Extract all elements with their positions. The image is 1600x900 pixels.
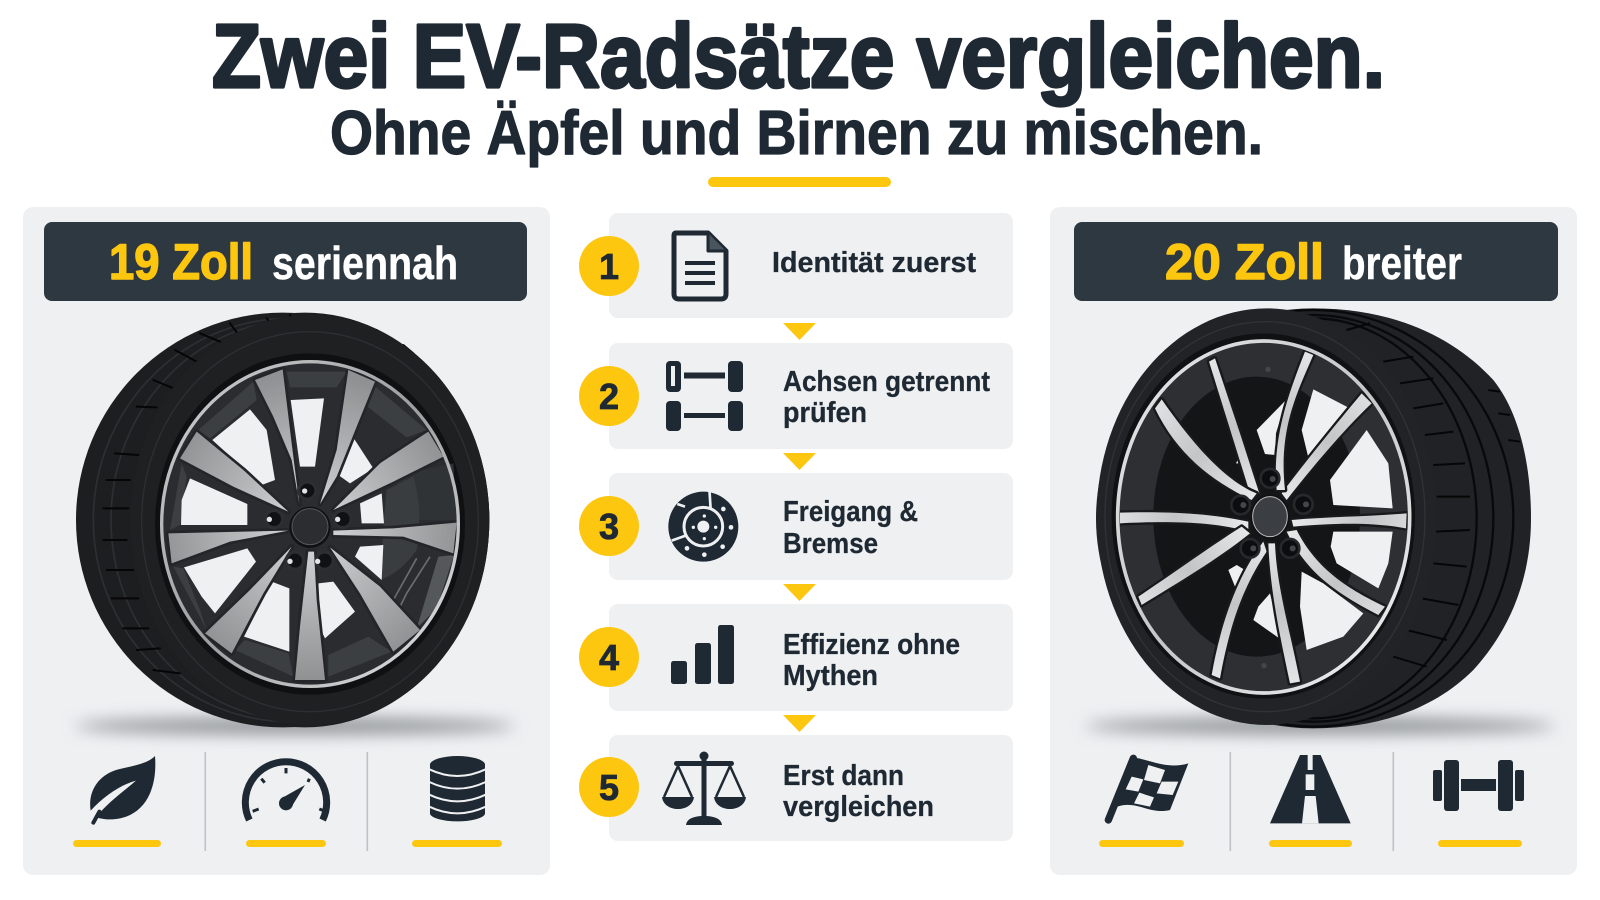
step 5: vergleichen (783, 791, 934, 823)
step 2 (579, 343, 1013, 449)
icon: bars (671, 625, 734, 684)
panel: 19 Zoll (23, 207, 550, 875)
wheel: 19 Zoll (75, 313, 515, 734)
icon: axles (666, 361, 743, 431)
step 3: Freigang & (783, 496, 918, 528)
icon rule 3 (412, 840, 502, 847)
process steps (579, 213, 1013, 841)
icon rule 3 (1438, 840, 1522, 847)
arrow 1 (783, 323, 816, 340)
step 1 (579, 213, 1013, 318)
step 3: Bremse (783, 528, 878, 560)
step 4: 4 (599, 637, 619, 678)
icon: road (1270, 755, 1351, 823)
heading: 20 Zoll breiter (1074, 222, 1558, 301)
step 4: Effizienz ohne (783, 629, 960, 661)
icon: scales (662, 752, 746, 825)
heading: 20 Zoll breiter: breiter (1342, 237, 1462, 289)
step 5: Erst dann (783, 760, 904, 792)
icon rule 1 (1099, 840, 1184, 847)
heading: 20 Zoll breiter: 20 Zoll (1165, 234, 1324, 290)
step 2: prüfen (783, 397, 867, 429)
step 1: Identität zuerst (772, 247, 976, 279)
step 2: Achsen getrennt (783, 366, 990, 398)
step 3 (579, 473, 1013, 580)
title: Zwei EV-Radsätze vergleichen. (212, 7, 1385, 107)
heading: 19 Zoll seriennah: seriennah (272, 237, 458, 289)
wheel: 20 Zoll (1085, 308, 1555, 734)
icon: document (674, 233, 726, 299)
icon: dumbbell (1433, 760, 1524, 811)
step 4 (579, 604, 1013, 711)
step 1: 1 (599, 246, 619, 287)
step 5 (579, 735, 1013, 841)
icon: leaf (90, 756, 155, 823)
arrow 2 (783, 453, 816, 470)
step 4: Mythen (783, 660, 878, 692)
subtitle: Ohne Äpfel und Birnen zu mischen. (330, 99, 1263, 168)
icon: speedometer (245, 762, 327, 820)
heading: 19 Zoll seriennah: 19 Zoll (109, 234, 253, 290)
title accent rule (708, 177, 891, 187)
icon rule 2 (246, 840, 326, 847)
heading: 19 Zoll seriennah (44, 222, 527, 301)
icon: brake disc (668, 488, 738, 562)
icon: checkered flag (1108, 757, 1188, 820)
step 5: 5 (599, 767, 619, 808)
step 2: 2 (599, 376, 619, 417)
icon rule 2 (1269, 840, 1352, 847)
step 3: 3 (599, 506, 619, 547)
icon rule 1 (73, 840, 161, 847)
panel: 20 Zoll (1050, 207, 1577, 875)
arrow 3 (783, 584, 816, 601)
arrow 4 (783, 715, 816, 732)
icon: battery stack (429, 756, 486, 821)
